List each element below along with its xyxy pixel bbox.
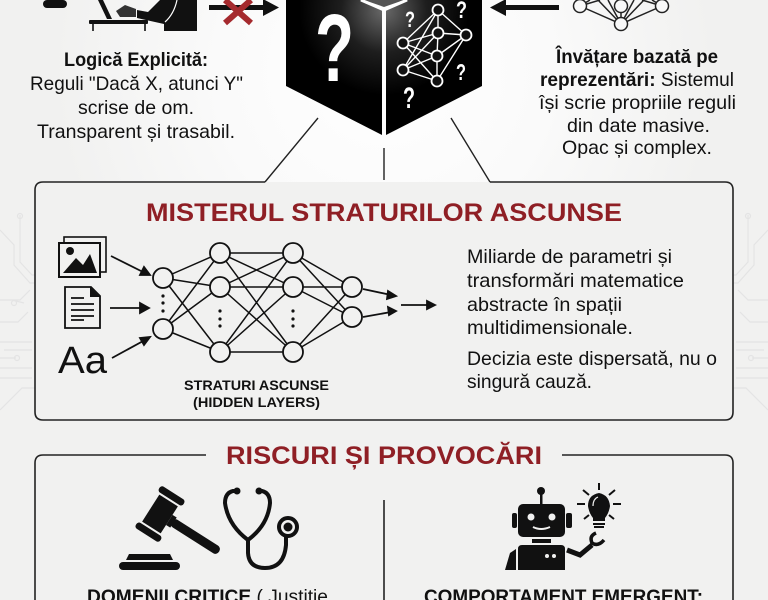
- text block: representation learning: își scrie propriile reguli: [538, 92, 736, 114]
- text block: explanation: [467, 246, 717, 393]
- text block: explanation: abstracte în spații: [467, 294, 622, 316]
- text block: representation learning: din date masive.: [567, 115, 710, 137]
- text block: explicit logic: Transparent și trasabil.: [37, 121, 235, 143]
- decorative circuit traces: [0, 214, 768, 410]
- icon: black box cube: ?: [405, 7, 415, 32]
- text block: explicit logic: Reguli "Dacă X, atunci Y": [30, 73, 243, 95]
- label: hidden layers: STRATURI ASCUNSE: [184, 377, 329, 393]
- text block: explicit logic: [30, 49, 243, 143]
- arrow: data to black box: [490, 0, 559, 16]
- icon: black box cube: [286, 0, 482, 135]
- label: hidden layers: (HIDDEN LAYERS): [193, 394, 320, 410]
- input arrows: [110, 256, 150, 358]
- text block: explanation: Miliarde de parametri și: [467, 246, 672, 268]
- heading: hidden layers: MISTERUL STRATURILOR ASCUNSE: [146, 199, 622, 227]
- icon: black box cube: ?: [403, 82, 415, 115]
- text block: explanation: singură cauză.: [467, 371, 592, 393]
- text block: representation learning: Opac și complex.: [562, 137, 712, 159]
- output arrows: [363, 289, 435, 317]
- icon: document: [65, 287, 100, 328]
- icon: black box cube: ?: [456, 59, 466, 85]
- chart: neural network diagram: [153, 243, 362, 362]
- panel: risks and challenges: [35, 441, 733, 600]
- text block: representation learning: Învățare bazată pe: [555, 44, 718, 68]
- text block: explicit logic: Logică Explicită:: [64, 49, 208, 71]
- icon: robot with light bulb: [505, 483, 621, 570]
- icon: image stack: [59, 237, 106, 277]
- text block: explanation: transformări matematice: [467, 270, 684, 292]
- panel: hidden layers mystery: [35, 118, 733, 420]
- text block: explanation: Decizia este dispersată, nu o: [467, 348, 717, 370]
- icon: neural network top right: [574, 0, 668, 30]
- label: hidden layers: [184, 377, 329, 410]
- text block: explicit logic: scrise de om.: [78, 97, 194, 119]
- icon: programmer at laptop: [43, 0, 197, 31]
- arrow: rule logic to black box, blocked: [209, 0, 279, 23]
- text block: representation learning: reprezentări: Sistemul: [540, 69, 734, 91]
- text block: representation learning: [538, 44, 736, 159]
- icon: gavel: [119, 485, 232, 573]
- heading: risks: RISCURI ȘI PROVOCĂRI: [226, 441, 542, 470]
- icon: stethoscope: [225, 488, 297, 568]
- text block: explanation: multidimensionale.: [467, 317, 633, 339]
- icon: text sample: Aa: [58, 340, 108, 382]
